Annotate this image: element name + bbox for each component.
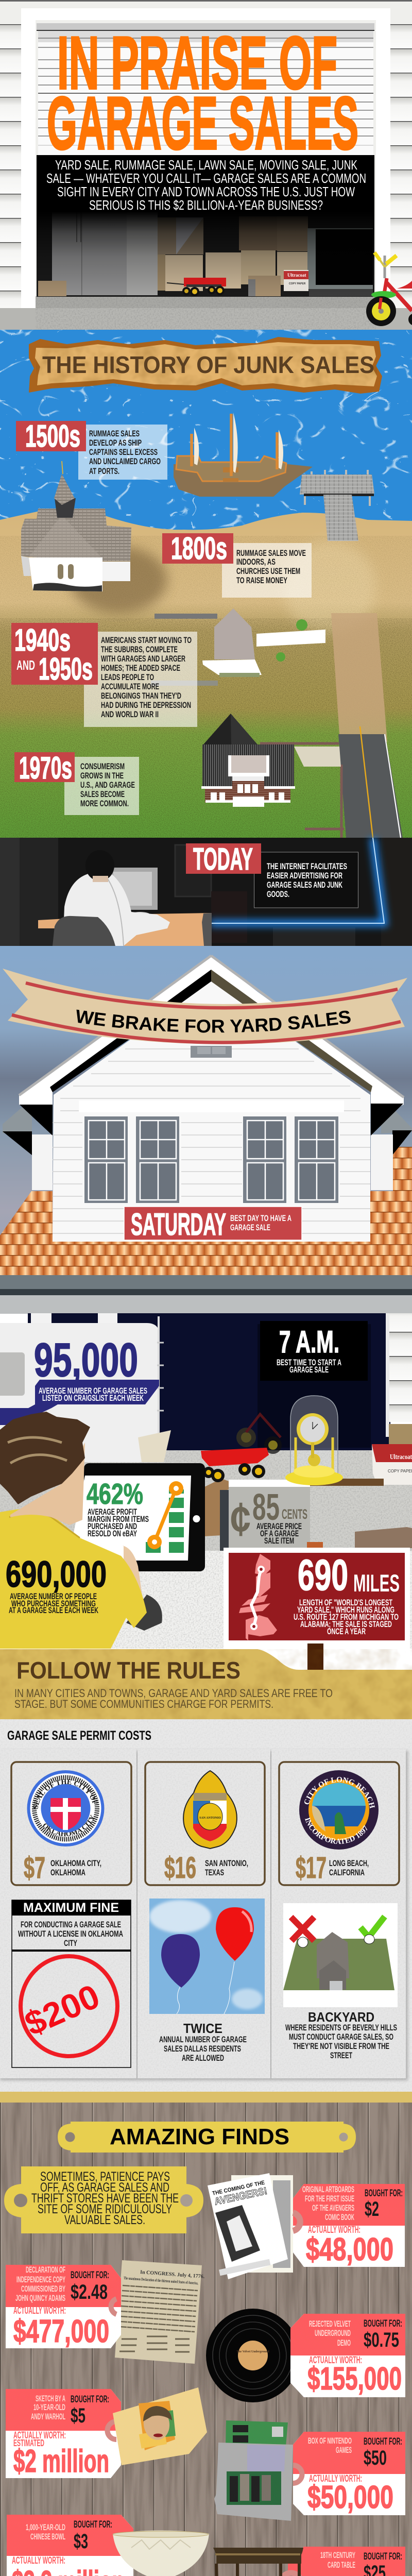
tag: card table: CARD TABLE [328,2560,355,2570]
icon: sailing ship [174,413,313,497]
ribbon heading: WE BRAKE FOR YARD SALES [76,1010,351,1032]
card: twice per year: ARE ALLOWED [182,2053,224,2063]
stat: 690 miles: ONCE A YEAR [327,1626,366,1636]
card: Long Beach: CALIFORNIA [329,1868,365,1877]
tag: Declaration copy: BOUGHT FOR: [71,2270,109,2281]
icon: San Antonio seal: SAN ANTONIO [199,1817,221,1820]
stat: 690,000: WHO PURCHASE SOMETHING [11,1599,96,1608]
1940s and 1950s date label: AND [16,657,35,673]
1970s text: MORE COMMON. [80,799,129,808]
dark gradient over interior [37,155,374,297]
today text: THE INTERNET FACILITATES [267,861,347,871]
amazing finds plaque [58,2122,356,2153]
growth chart icon [146,1481,184,1553]
card: twice per year: TWICE [183,2021,222,2036]
today text: GOODS. [267,889,289,899]
tablet with 462% stat: 462% [87,1478,143,1511]
today date label [186,842,261,876]
tag: Velvet Underground demo: DEMO [337,2338,351,2348]
icon: route map [239,1554,277,1640]
card: maximum fine: FOR CONDUCTING A GARAGE SALE [21,1920,121,1929]
panel: garage sale statistics [0,1313,412,1649]
1940s and 1950s text: HAD DURING THE DEPRESSION [101,700,191,710]
today text: GARAGE SALES AND JUNK [267,880,342,890]
stat: 95,000: AVERAGE NUMBER OF GARAGE SALES [39,1386,147,1396]
stat: 95,000 [34,1334,147,1403]
balloons photo [149,1899,265,2014]
card: twice per year [149,1899,265,2063]
card: maximum fine: WITHOUT A LICENSE IN OKLAHOMA [18,1929,123,1939]
card: backyard [283,1903,398,2060]
icon: vinyl record: The Velvet Underground [236,2350,269,2353]
card: San Antonio [145,1762,265,1885]
stat: 85 cents: CENTS [282,1506,307,1522]
tablet with 462% stat: AVERAGE PROFIT [88,1507,137,1517]
tag: Chinese bowl: CHINESE BOWL [30,2532,65,2541]
panel: history of junk sales [0,330,412,838]
icon: man at computer [38,850,212,946]
paper box: Ultracoat [287,273,306,278]
tag: Nintendo games: GAMES [336,2445,352,2455]
today date label: TODAY [193,842,253,876]
card: Oklahoma City: $7 [24,1851,45,1885]
icon: Declaration of Independence [115,2260,205,2364]
1940s and 1950s text: AMERICANS START MOVING TO [101,635,192,645]
intro plaque: OFF, AS GARAGE SALES AND [40,2180,169,2195]
stat: 85 cents [229,1487,310,1548]
icon: woman from behind [0,1412,162,1649]
intro plaque: VALUABLE SALES. [64,2213,145,2227]
1800s text: TO RAISE MONEY [236,575,287,585]
icon: Declaration of Independence: The unanimous Declaration of the thirteen united States of America, [124,2276,198,2285]
tag: Velvet Underground demo: REJECTED VELVET [309,2319,351,2329]
today text: EASIER ADVERTISING FOR [267,871,342,880]
saturday callout: GARAGE SALE [230,1223,270,1232]
sand and grass ground [0,510,412,838]
paper background with panels [0,1719,412,2092]
tag: Chinese bowl: BOUGHT FOR: [74,2519,112,2530]
tag: Velvet Underground demo [290,2314,405,2397]
1940s and 1950s text [84,632,197,727]
tag: Velvet Underground demo: UNDERGROUND [315,2328,351,2338]
1500s date label [16,419,86,453]
stat: 95,000: 95,000 [34,1334,138,1386]
card: San Antonio: $16 [164,1851,196,1885]
sky [0,946,412,1278]
garage interior with stored items [37,155,374,297]
intro plaque: SITE OF SOME RIDICULOUSLY [38,2202,172,2216]
title [47,21,358,165]
tag: Warhol sketch: $2 million [13,2444,109,2479]
1970s text: CONSUMERISM [80,761,125,771]
icon: large house with fence [201,714,344,838]
gable roofline [19,956,404,1242]
intro plaque [4,2166,203,2233]
panel: today [0,838,412,946]
tag: Declaration copy: INDEPENDENCE COPY [16,2275,65,2284]
1940s and 1950s date label: 1940s [14,623,71,657]
tag: Warhol sketch: ESTIMATED [13,2438,44,2448]
wood background [0,2092,412,2576]
icon: brown box and table [203,1479,384,1551]
door panel with slats [37,23,374,155]
icon: paper box [372,1444,412,1485]
card: Long Beach [278,1761,400,1886]
intro plaque: SOMETIMES, PATIENCE PAYS [40,2170,170,2184]
icon: Oklahoma City seal [27,1770,104,1846]
icon: church [21,461,167,613]
tag: Warhol sketch: BOUGHT FOR: [71,2394,109,2405]
tag: Chinese bowl [7,2515,133,2576]
icon: Warhol sketch [113,2387,207,2465]
1800s text: CHURCHES USE THEM [236,566,300,576]
card: maximum fine: MAXIMUM FINE [23,1901,119,1915]
1800s date label [162,531,233,566]
white clapboard wall [53,1049,370,1233]
card: maximum fine: CITY [64,1938,77,1948]
panel: garage hero [0,0,412,330]
card: backyard: BACKYARD [308,2009,374,2025]
tag: Avengers artboards [293,2184,405,2267]
stat: 95,000: LISTED ON CRAIGSLIST EACH WEEK [42,1393,144,1403]
tag: Chinese bowl: ACTUALLY WORTH: [12,2555,65,2566]
tag: Declaration copy: $2.48 [71,2281,108,2303]
card: Oklahoma City [10,1761,132,1886]
stat: 7 a.m.: 7 A.M. [279,1325,339,1359]
icon: Avengers comic: THE COMING OF THE [212,2180,265,2197]
icon: Oklahoma City seal: OKLAHOMA CITY [43,1815,95,1836]
tag: Warhol sketch [6,2389,121,2479]
1800s text [222,543,312,598]
dark room background [0,838,412,946]
stat: 85 cents: SALE ITEM [264,1536,294,1546]
icon: Nintendo cartridge [214,2420,293,2521]
intro text: IN MANY CITIES AND TOWNS, GARAGE AND YARD SALES ARE FREE TO [14,1687,333,1700]
stat: 7 a.m.: BEST TIME TO START A [277,1358,341,1367]
tag: Avengers artboards: COMIC BOOK [325,2212,354,2222]
card: maximum fine [12,1900,131,2067]
parchment banner [29,337,382,394]
intro text [46,157,366,213]
card: backyard: STREET [330,2050,352,2060]
1940s and 1950s text: AND WORLD WAR II [101,709,159,719]
saturday callout: SATURDAY [131,1207,226,1242]
icon: card table [213,2548,303,2576]
tag: Avengers artboards: FOR THE FIRST ISSUE [305,2194,354,2204]
1800s text: RUMMAGE SALES MOVE [236,548,306,558]
tag: Nintendo games [293,2432,405,2515]
icon: Long Beach seal: INCORPORATED 1897 [305,1817,368,1844]
icon: RV camper [0,1313,171,1462]
stat: 690 miles [224,1548,410,1649]
1940s and 1950s text: ACCUMULATE MORE [101,682,159,691]
1800s text: INDOORS, AS [236,557,276,567]
tag: Warhol sketch: ANDY WARHOL [31,2412,65,2421]
tag: Avengers artboards: ORIGINAL ARTBOARDS [302,2184,354,2194]
1970s text: GROWS IN THE [80,771,124,781]
tablet with 462% stat: PURCHASED AND [88,1521,137,1531]
neon cable [210,838,384,923]
house wall siding [0,0,412,330]
card: twice per year: ANNUAL NUMBER OF GARAGE [159,2035,247,2044]
stat: 85 cents: ¢ [230,1493,251,1546]
panel: amazing finds [0,2092,412,2576]
card: twice per year: SALES DALLAS RESIDENTS [164,2044,241,2054]
stat: 7 a.m.: GARAGE SALE [289,1365,329,1375]
1500s text: CAPTAINS SELL EXCESS [89,447,158,457]
1500s text: AND UNCLAIMED CARGO [89,456,161,466]
concrete driveway [0,296,412,330]
1500s date label: 1500s [25,419,80,453]
icon: Chinese bowl [113,2531,209,2576]
icon: Long Beach seal: CITY OF LONG BEACH [304,1777,375,1809]
1800s date label: 1800s [171,531,227,566]
1500s text: RUMMAGE SALES [89,429,140,438]
icon: glass dome clock [285,1396,343,1485]
icon: Oklahoma City seal: SEAL OF THE CITY OF [33,1780,98,1809]
icon: suburban house [151,608,325,686]
icon: tricycle [366,252,412,326]
tag: Velvet Underground demo: ACTUALLY WORTH: [309,2355,362,2366]
1940s and 1950s text: LEADS PEOPLE TO [101,672,154,682]
permit costs heading: GARAGE SALE PERMIT COSTS [7,1728,151,1743]
attic vent [191,1046,232,1058]
tag: Chinese bowl: 1,000-YEAR-OLD [26,2522,65,2532]
card: Long Beach: $17 [296,1851,327,1885]
windows [79,1100,344,1203]
side gables [3,1108,412,1190]
icon: Avengers comic [208,2173,293,2279]
garage door trim [21,8,390,308]
tag: Nintendo games: $50 [364,2447,387,2469]
panel: follow the rules [0,1643,412,2092]
ribbon banner [3,969,407,1044]
roof fascia [0,1275,412,1314]
today text [254,852,358,908]
stat: 690,000: 690,000 [6,1554,107,1595]
tag: Avengers artboards: $2 [365,2198,379,2221]
tag: Declaration copy [6,2265,121,2349]
1500s text: DEVELOP AS SHIP [89,438,142,448]
1940s and 1950s date label: 1950s [39,652,93,686]
intro text [14,1687,333,1710]
icon: Declaration of Independence: In CONGRESS. July 4, 1776. [140,2269,205,2280]
stat: 7 a.m. [260,1321,368,1381]
card: San Antonio: SAN ANTONIO, [205,1858,248,1868]
card: San Antonio: TEXAS [205,1868,224,1877]
stat: 690 miles: 690 [298,1551,348,1599]
tag: Chinese bowl: $3 [74,2530,88,2553]
intro text: STAGE. BUT SOME COMMUNITIES CHARGE FOR PERMITS. [14,1698,273,1710]
red wagon [167,278,226,296]
tablet with 462% stat [72,1463,205,1571]
icon: Avengers comic: AVENGERS! [213,2185,268,2208]
1500s text: AT PORTS. [89,466,119,476]
1970s date label [14,751,75,785]
card: Long Beach: LONG BEACH, [329,1858,369,1868]
dirt road [331,613,387,742]
1970s text [64,757,139,815]
1940s and 1950s text: THE SUBURBS, COMPLETE [101,645,178,654]
tablet with 462% stat: MARGIN FROM ITEMS [88,1514,149,1524]
tag: Nintendo games: ACTUALLY WORTH: [309,2473,362,2484]
paper box [284,270,308,291]
tag: Declaration copy: ACTUALLY WORTH: [13,2306,66,2316]
tag: Warhol sketch: 10-YEAR-OLD [33,2402,65,2412]
saturday callout: BEST DAY TO HAVE A [230,1213,291,1223]
1940s and 1950s text: HOMES; THE ADDED SPACE [101,663,180,673]
$200 stamp [19,1956,117,2056]
backyard illustration [283,1903,398,2007]
tag: Warhol sketch: SKETCH BY A [36,2394,65,2403]
tag: Nintendo games: BOX OF NINTENDO [308,2436,352,2446]
1940s and 1950s date label [11,623,98,686]
icon: wooden dock [300,470,374,541]
history heading: THE HISTORY OF JUNK SALES [42,351,374,378]
tag: card table [281,2547,405,2576]
icon: vinyl record [206,2309,300,2402]
card: Oklahoma City: OKLAHOMA [50,1868,85,1877]
1970s text: U.S., AND GARAGE [80,780,135,790]
tag: Avengers artboards: ACTUALLY WORTH: [308,2225,360,2235]
panel: we brake for yard sales [0,946,412,1314]
tablet with 462% stat: RESOLD ON eBAY [88,1529,137,1538]
stat: 85 cents: AVERAGE PRICE [256,1521,302,1531]
tag: Warhol sketch: $5 [71,2404,85,2427]
1940s and 1950s text: BELONGINGS THAN THEY'D [101,691,181,701]
intro text: SERIOUS IS THIS $2 BILLION-A-YEAR BUSINESS? [89,197,323,213]
tag: Declaration copy: $477,000 [13,2314,109,2349]
amazing finds plaque: AMAZING FINDS [110,2124,289,2149]
stat: 690,000 [6,1554,107,1615]
garage interior and floor [0,1313,412,1649]
water background [0,330,412,536]
icon: red wagon [201,1448,269,1482]
follow the rules heading: FOLLOW THE RULES [16,1657,241,1684]
tag: Avengers artboards: OF THE AVENGERS [312,2203,354,2213]
1970s text: SALES BECOME [80,789,125,799]
1500s text [78,425,167,480]
stat: 690,000: AT A GARAGE SALE EACH WEEK [9,1605,98,1615]
tiled roof [0,1147,412,1275]
stat: 85 cents: 85 [252,1487,280,1528]
1970s date label: 1970s [19,751,72,785]
icon: San Antonio seal [183,1771,237,1849]
icon: Long Beach seal [299,1770,379,1850]
card: Oklahoma City: OKLAHOMA CITY, [50,1858,101,1868]
tag: Warhol sketch: ACTUALLY WORTH: [13,2430,66,2441]
intro plaque: THRIFT STORES HAVE BEEN THE [31,2191,179,2206]
tag: card table: 18TH CENTURY [320,2550,355,2560]
stat: 85 cents: OF A GARAGE [260,1529,299,1538]
tag: Declaration copy: DECLARATION OF [26,2265,65,2275]
tag: Declaration copy: COMMISSIONED BY [21,2284,65,2294]
$200 stamp: $200 [19,1977,105,2043]
stat: 690,000: AVERAGE NUMBER OF PEOPLE [10,1591,97,1601]
icon: shadowed tricycle [236,1414,282,1454]
paper box: COPY PAPER [289,282,306,285]
paved road [338,726,403,838]
folder tab background [0,1643,412,1720]
1940s and 1950s text: WITH GARAGES AND LARGER [101,654,185,664]
icon: cardboard box right [307,1527,412,1548]
tag: Declaration copy: JOHN QUINCY ADAMS [15,2293,65,2303]
